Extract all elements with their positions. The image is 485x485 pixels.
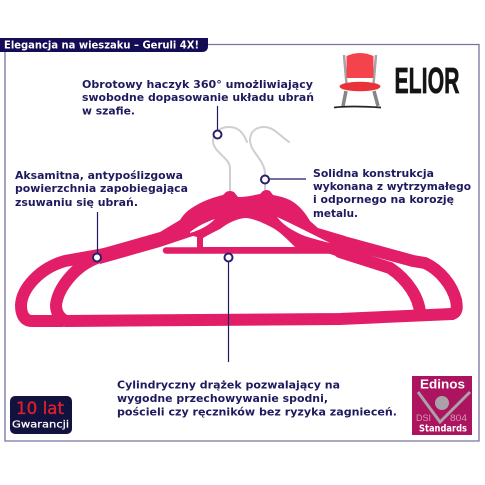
- icon: metal hooks: [213, 127, 289, 195]
- text block: solid construction: Solidna konstrukcja: [313, 167, 434, 180]
- badge: 10 year warranty: 10 lat: [16, 399, 65, 418]
- text block: solid construction: i odpornego na korozję: [313, 193, 454, 206]
- hanger: central hub: [100, 190, 345, 264]
- icon: red chair logo: [334, 53, 381, 108]
- hanger: inner arch: [203, 218, 295, 247]
- text block: swivel hook: Obrotowy haczyk 360° umożliwiający: [82, 78, 313, 91]
- badge: Edinos standards: Edinos: [420, 376, 465, 392]
- text block: swivel hook: swobodne dopasowanie układu ubrań: [82, 91, 314, 104]
- text block: solid construction: metalu.: [313, 207, 358, 220]
- badge: 10 year warranty: [10, 396, 72, 434]
- panel: frame border: [5, 44, 479, 441]
- chart: pink hangers: [21, 190, 457, 321]
- heading: title bar: Elegancja na wieszaku – Geruli 4X!: [4, 40, 199, 52]
- hanger: left gap: [190, 219, 215, 233]
- text block: velvet surface: zsuwaniu się ubrań.: [15, 196, 138, 209]
- text block: velvet surface: powierzchnia zapobiegająca: [15, 182, 188, 195]
- text block: cylindrical bar: pościeli czy ręczników bez ryzyka zagnieceń.: [117, 406, 397, 418]
- text block: cylindrical bar: Cylindryczny drążek pozwalający na: [117, 378, 340, 392]
- callout: surface marker: [93, 212, 101, 262]
- text block: swivel hook: w szafie.: [82, 104, 135, 118]
- text block: solid construction: wykonana z wytrzymałego: [313, 180, 471, 193]
- callout: hook marker: [214, 106, 222, 138]
- callout: construction marker: [261, 176, 306, 184]
- badge: Edinos standards: Standards: [419, 424, 467, 434]
- badge: Edinos standards: DSI: [416, 413, 431, 423]
- hanger: left ends: [21, 240, 457, 321]
- text block: velvet surface: Aksamitna, antypoślizgowa: [15, 169, 183, 182]
- callout: rail marker: [224, 254, 232, 362]
- text block: cylindrical bar: wygodne przechowywanie spodni,: [117, 392, 328, 405]
- hanger: lower gap: [177, 238, 197, 246]
- hanger: right gap: [277, 217, 330, 243]
- badge: Edinos standards: 804: [450, 413, 467, 423]
- hanger: lower rail: [166, 247, 333, 254]
- badge: Edinos standards: [412, 376, 472, 435]
- badge: 10 year warranty: Gwarancji: [12, 420, 69, 430]
